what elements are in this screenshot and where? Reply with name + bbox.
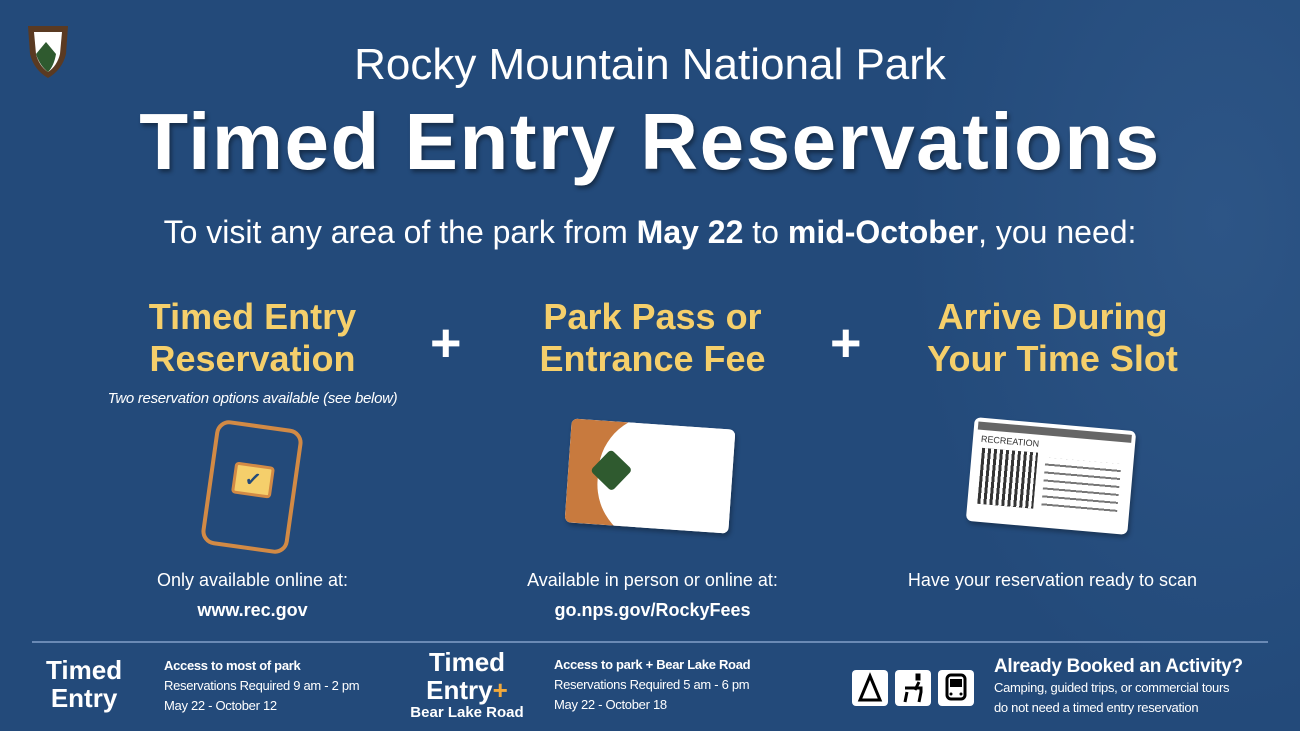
- note: Two reservation options available (see below): [108, 390, 397, 407]
- title: Timed Entry Reservations: [139, 97, 1161, 186]
- label: [46, 655, 122, 713]
- panel: reservation: [108, 296, 397, 620]
- details: Reservations Required 5 am - 6 pm: [554, 677, 749, 692]
- text: Only available online at:: [157, 570, 348, 590]
- panel: pass: [527, 296, 778, 620]
- icon: ticket: RECREATION: [981, 434, 1040, 449]
- text: Already Booked an Activity?: [994, 656, 1243, 677]
- heading: Timed Entry: [149, 296, 356, 337]
- plus sign: +: [430, 313, 462, 373]
- details: [554, 657, 750, 712]
- icon: phone: ✓: [243, 468, 263, 492]
- footer: timed entry plus: [410, 647, 750, 721]
- panel: reservation: www.rec.gov: [197, 600, 308, 620]
- intro text: To visit any area of the park from May 22 to mid-October, you need:: [164, 214, 1136, 250]
- icon: pass card: [565, 418, 735, 534]
- icon: NPS arrowhead: [28, 26, 68, 78]
- panel: pass: go.nps.gov/RockyFees: [554, 600, 751, 620]
- label: Entry: [51, 683, 117, 713]
- icon: ticket: [966, 417, 1136, 535]
- details: May 22 - October 18: [554, 697, 667, 712]
- details: May 22 - October 12: [164, 698, 277, 713]
- details: Access to most of park: [164, 658, 300, 673]
- details: [164, 658, 359, 713]
- divider: [32, 641, 1268, 643]
- text: Camping, guided trips, or commercial tours: [994, 680, 1229, 695]
- heading: Reservation: [149, 338, 356, 379]
- label: Bear Lake Road: [410, 704, 524, 721]
- heading: Arrive During: [937, 296, 1168, 337]
- text: Have your reservation ready to scan: [908, 570, 1197, 590]
- heading: Park Pass or: [543, 296, 762, 337]
- heading: Entrance Fee: [539, 338, 766, 379]
- text: [994, 656, 1243, 715]
- subtitle: Rocky Mountain National Park: [354, 40, 946, 89]
- details: Reservations Required 9 am - 2 pm: [164, 678, 359, 693]
- icon: phone: [200, 418, 304, 556]
- heading: [927, 296, 1178, 379]
- text: do not need a timed entry reservation: [994, 700, 1198, 715]
- details: Access to park + Bear Lake Road: [554, 657, 750, 672]
- footer: activities: [852, 656, 1243, 715]
- icons: [852, 670, 974, 706]
- footer: timed entry: [46, 655, 359, 713]
- label: [410, 647, 524, 721]
- label: Entry+: [426, 675, 508, 705]
- background globe shading: [900, 0, 1300, 731]
- label: Timed: [46, 655, 122, 685]
- plus sign: +: [830, 313, 862, 373]
- panel: arrive: [908, 296, 1197, 590]
- heading: [539, 296, 766, 379]
- heading: Your Time Slot: [927, 338, 1178, 379]
- heading: [149, 296, 356, 379]
- text: Available in person or online at:: [527, 570, 778, 590]
- label: Timed: [429, 647, 505, 677]
